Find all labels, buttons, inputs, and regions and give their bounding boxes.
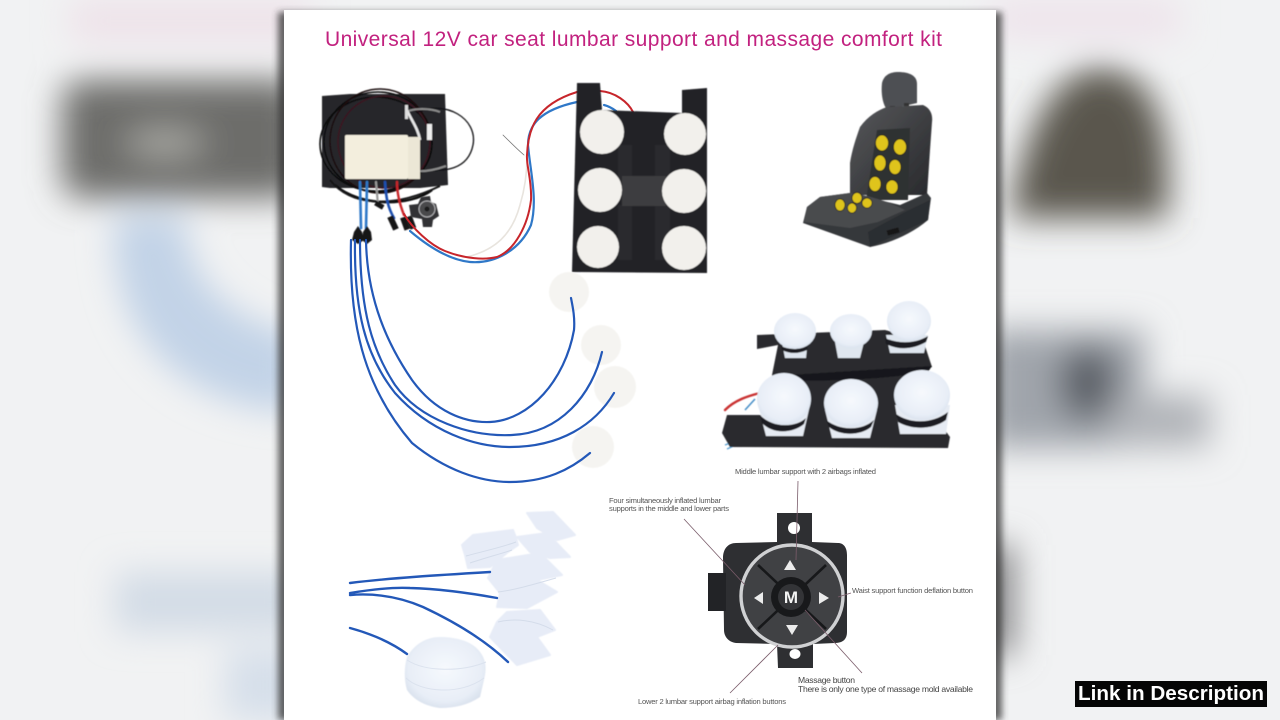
wires (725, 393, 760, 410)
dividers (758, 565, 826, 629)
backrest (850, 105, 932, 195)
lower airbags (757, 370, 950, 438)
seat base (803, 193, 931, 247)
centre button (771, 577, 811, 617)
label: deflation button: Waist support function deflation button (852, 586, 973, 595)
label: massage button: There is only one type of massage mold available (798, 684, 973, 694)
leader lines (684, 481, 862, 693)
label: lower lumbar inflation: Lower 2 lumbar support airbag inflation buttons (638, 697, 786, 706)
label: four inflated lumbar supports: supports in the middle and lower parts (609, 504, 729, 513)
coiled black cables (320, 89, 440, 202)
control box with wiring harness (320, 89, 474, 244)
stacked bellows (462, 512, 575, 665)
foam air bellows with blue tubes (350, 512, 575, 708)
button housing (723, 513, 847, 668)
label: four inflated lumbar supports (609, 496, 729, 513)
mounting plate (322, 94, 448, 188)
bellows tubes (350, 572, 508, 662)
beige controller (408, 137, 420, 179)
headrest (882, 72, 917, 110)
upper airbags (774, 301, 931, 358)
black air bag pad (572, 83, 707, 273)
harness tubes (360, 182, 404, 228)
label: middle lumbar support: Middle lumbar support with 2 airbags inflated (735, 467, 876, 476)
main white panel (284, 10, 996, 720)
side connector (708, 573, 726, 611)
inflated lumbar pad with six airbags (722, 301, 950, 449)
loop cable (418, 108, 474, 171)
tubes (351, 240, 614, 482)
label: four inflated lumbar supports: Four simultaneously inflated lumbar (609, 496, 721, 505)
silver ring (741, 545, 843, 647)
black pad (722, 330, 950, 448)
title: Universal 12V car seat lumbar support and massage comfort kit (325, 28, 942, 51)
direction arrows (754, 560, 829, 635)
cushion top (804, 193, 905, 228)
car seat with yellow massage nodes (803, 72, 932, 247)
bellows edge shading (466, 542, 556, 630)
yellow nodes (835, 135, 906, 213)
backrest centre panel (866, 128, 910, 200)
connectors (352, 201, 416, 244)
airbag discs (549, 272, 636, 468)
pad wires red blue white (404, 91, 633, 262)
annotated control button diagram (684, 481, 862, 693)
four long blue air tubes with airbags (351, 240, 636, 482)
mounting holes (788, 522, 800, 534)
small control pad icon (409, 196, 439, 227)
M label: M (784, 588, 798, 607)
thick foam disc (405, 637, 486, 708)
link in description badge: Link in Description (1078, 682, 1264, 705)
label: massage button (798, 675, 973, 694)
panel shadow (278, 12, 1002, 720)
label: massage button: Massage button (798, 675, 855, 685)
